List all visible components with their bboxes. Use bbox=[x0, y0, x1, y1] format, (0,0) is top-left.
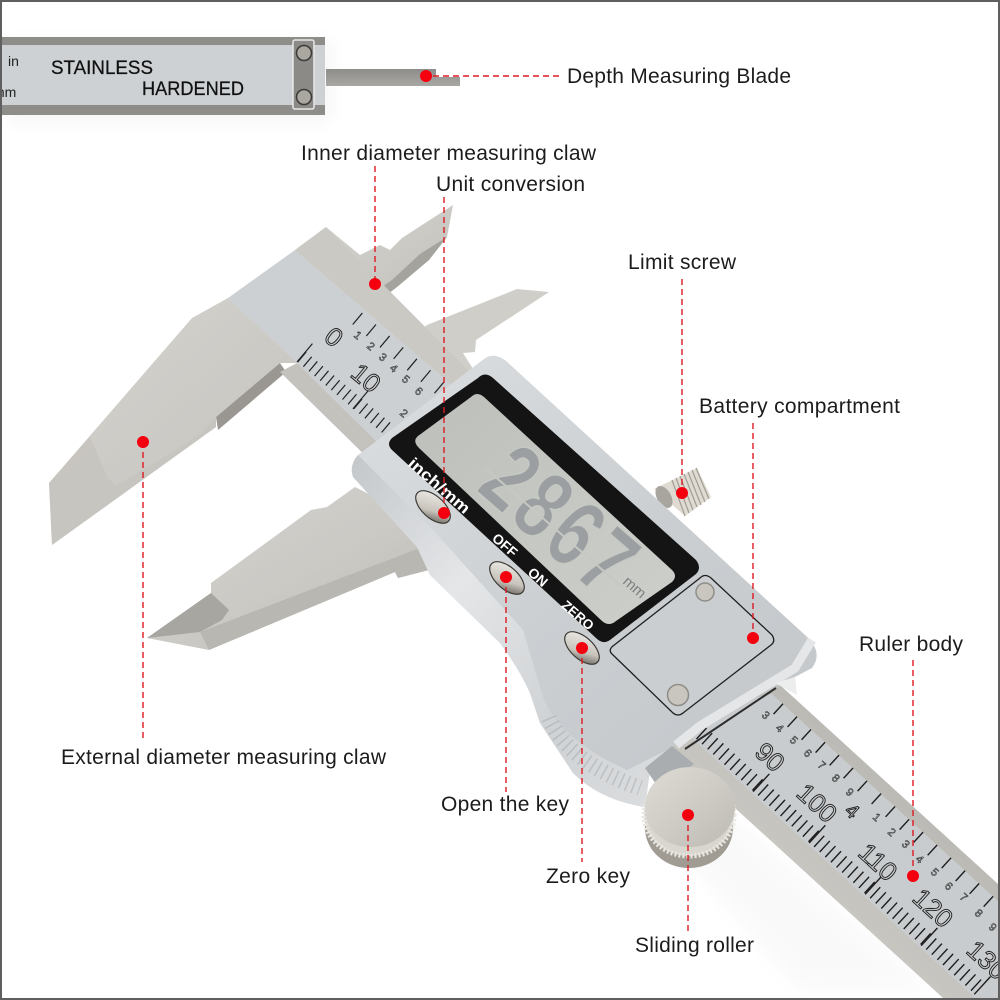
label: limit screw: Limit screw bbox=[628, 251, 737, 274]
ruler numbers: 9 bbox=[986, 921, 999, 934]
sliding roller bbox=[644, 767, 735, 868]
text: stainless: STAINLESS bbox=[51, 58, 153, 79]
fixed beam lower band bbox=[280, 363, 400, 470]
limit screw bbox=[652, 468, 711, 516]
fixed beam numbers: 5 bbox=[399, 373, 412, 386]
label: ruler body: Ruler body bbox=[859, 633, 964, 656]
callouts: red dots bbox=[137, 70, 919, 882]
key label: zero: ZERO bbox=[559, 597, 597, 633]
rail body bbox=[2, 37, 325, 115]
ruler numbers: 100 bbox=[791, 777, 843, 829]
fixed beam numbers: 10 bbox=[345, 357, 387, 399]
panel: depth blade close-up bbox=[0, 37, 460, 120]
external jaw edge bbox=[49, 417, 216, 545]
fixed beam numbers: 3 bbox=[376, 351, 389, 364]
label: battery compartment: Battery compartment bbox=[699, 395, 900, 418]
ruler steel bbox=[654, 685, 998, 998]
label: zero key: Zero key bbox=[546, 865, 630, 888]
clamp plate bbox=[293, 40, 314, 109]
fixed beam numbers: 6 bbox=[412, 385, 425, 398]
ruler body bbox=[654, 681, 1000, 998]
cover screw bottom bbox=[668, 684, 688, 706]
ruler body shadow bbox=[670, 790, 930, 990]
key label: inch/mm: inch/mm bbox=[404, 455, 473, 518]
fixed beam scale bbox=[297, 307, 443, 446]
upper inner claw bbox=[295, 205, 453, 320]
upper thin claw bbox=[412, 289, 549, 380]
fixed beam numbers: 2 bbox=[397, 407, 410, 420]
ruler numbers: 4 bbox=[773, 722, 786, 735]
ruler numbers: 110 bbox=[853, 837, 903, 887]
ruler numbers: 7 bbox=[815, 759, 828, 772]
ruler inch ticks bbox=[778, 708, 992, 904]
text: hardened: HARDENED bbox=[142, 79, 244, 100]
roller shaft bbox=[645, 746, 694, 790]
fixed beam numbers bbox=[319, 321, 425, 420]
grip knurl bbox=[549, 718, 640, 788]
label: depth measuring blade: Depth Measuring Blade bbox=[567, 65, 791, 88]
body lower side face bbox=[352, 455, 673, 807]
lcd unit: mm bbox=[619, 573, 649, 602]
key label: on: ON bbox=[525, 564, 551, 590]
scale text: in: in bbox=[8, 53, 19, 69]
clamp screw bottom bbox=[296, 90, 312, 104]
body end lip bbox=[676, 640, 812, 745]
external jaw notch face bbox=[216, 363, 286, 430]
rail face bbox=[2, 45, 325, 105]
label: sliding roller: Sliding roller bbox=[635, 934, 754, 957]
ruler numbers: 2 bbox=[885, 826, 898, 839]
fixed beam face bbox=[228, 250, 452, 455]
ruler numbers: 6 bbox=[942, 880, 955, 893]
ruler mm ticks bbox=[701, 733, 981, 990]
ruler numbers: 6 bbox=[801, 747, 814, 760]
display bezel bbox=[389, 374, 699, 642]
fixed beam numbers: 4 bbox=[387, 362, 400, 375]
ruler numbers: 120 bbox=[907, 882, 959, 934]
callouts: dashed leader lines bbox=[143, 76, 913, 931]
fixed beam numbers: 1 bbox=[351, 329, 364, 342]
ruler numbers: 7 bbox=[957, 891, 970, 904]
fixed beam numbers: 0 bbox=[319, 321, 349, 353]
illustration: caliper bbox=[49, 205, 1000, 998]
ruler numbers: 4 bbox=[840, 800, 863, 823]
unit key bbox=[410, 485, 456, 529]
external upper jaw bbox=[49, 298, 330, 545]
ruler numbers: 8 bbox=[829, 772, 842, 785]
cover screw top bbox=[696, 583, 714, 601]
lower jaw bbox=[147, 487, 430, 650]
inner claw bevel bbox=[369, 237, 447, 307]
ruler numbers: 5 bbox=[787, 734, 800, 747]
lower jaw edge bbox=[200, 546, 429, 650]
lcd reading: 2867 bbox=[453, 425, 657, 624]
zero key bbox=[559, 626, 605, 670]
ruler numbers: 5 bbox=[928, 866, 941, 879]
label: unit conversion: Unit conversion bbox=[436, 173, 585, 196]
ruler numbers: 90 bbox=[749, 736, 791, 778]
label: external diameter measuring claw: External diameter measuring claw bbox=[61, 746, 387, 769]
ruler numbers: 8 bbox=[972, 907, 985, 920]
ruler numbers: 3 bbox=[899, 838, 912, 851]
ruler numbers bbox=[749, 709, 1000, 986]
clamp screw top bbox=[296, 46, 312, 60]
ruler slot edge bbox=[685, 688, 776, 749]
lcd screen bbox=[415, 394, 675, 624]
fixed beam numbers: 2 bbox=[364, 340, 377, 353]
battery cover bbox=[610, 576, 774, 715]
display unit body bbox=[352, 356, 817, 807]
open key bbox=[484, 556, 530, 600]
ruler long ticks bbox=[753, 774, 990, 994]
ruler scale bbox=[696, 681, 1000, 996]
depth blade bbox=[326, 69, 460, 86]
fixed beam steel band bbox=[295, 227, 470, 395]
ruler numbers: 3 bbox=[759, 709, 772, 722]
slot notch bbox=[775, 677, 797, 695]
label: open the key: Open the key bbox=[441, 793, 570, 816]
label: inner diameter measuring claw: Inner diameter measuring claw bbox=[301, 142, 597, 165]
ruler numbers: 1 bbox=[870, 811, 883, 824]
ruler face bbox=[669, 694, 998, 998]
ruler numbers: 9 bbox=[843, 786, 856, 799]
key label: off: OFF bbox=[489, 530, 521, 561]
ruler numbers: 4 bbox=[913, 853, 926, 866]
lower jaw bevel bbox=[147, 593, 229, 638]
